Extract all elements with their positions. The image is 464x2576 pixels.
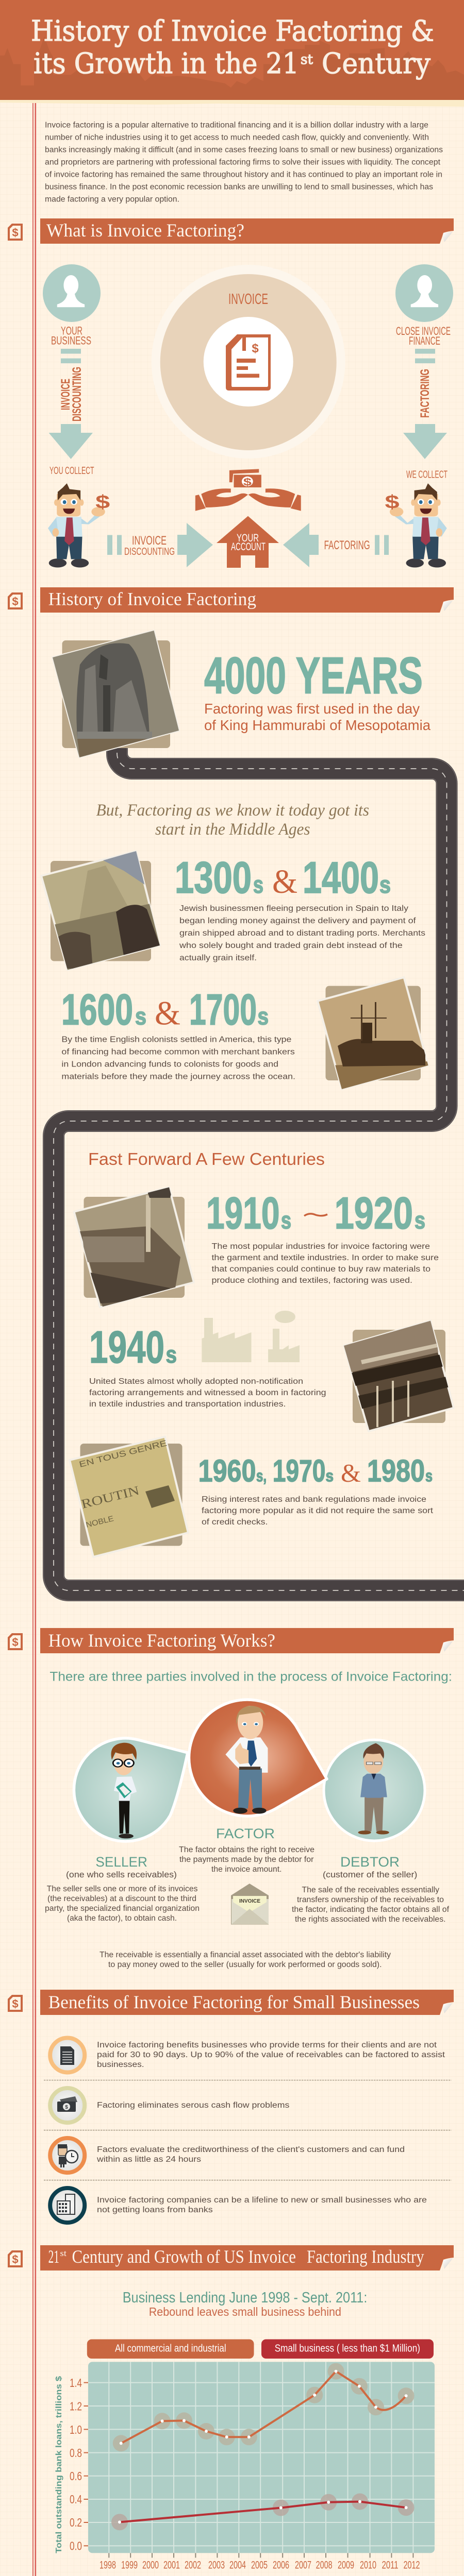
section heading: 21st century growth: Factoring Industry [307,2246,424,2267]
benefit: 24 hour funding [50,2138,405,2173]
photo: vintage paper [70,1437,188,1557]
1910s to 1920s [206,1188,439,1285]
chart legend [87,2339,434,2359]
photo: medieval trading [41,850,165,974]
icon: hands and money [195,469,301,511]
close invoice finance column [395,264,453,480]
business lending heading: Business Lending June 1998 - Sept. 2011: [123,2290,367,2306]
1600s and 1700s: in London advancing funds to colonists for goods and [61,1060,278,1069]
benefit: 24 hour funding: Factors evaluate the creditworthiness of the client's customers and can fund [97,2145,405,2154]
middle ages callout: But, Factoring as we know it today got its [96,801,369,820]
debtor description [292,1854,450,1924]
1910s to 1920s: produce clothing and textiles, factoring was used. [211,1276,412,1285]
factor description: FACTOR [216,1826,275,1841]
arrow: factoring: FACTORING [324,538,370,552]
benefit: terms: paid for 30 to 90 days. Up to 90% of the value of receivables can be factored to assist [97,2050,445,2059]
section heading: how invoice factoring works [8,1628,454,1653]
1910s to 1920s: s [415,1207,425,1233]
1300s and 1400s [175,853,425,962]
1910s to 1920s: 1910 [206,1188,279,1239]
title: History of Invoice Factoring & [31,14,434,47]
character: we collect [385,483,447,567]
seller description: (aka the factor), to obtain cash. [67,1914,177,1923]
seller description [45,1854,200,1923]
x axis labels: 2011 [382,2559,399,2571]
y axis labels: 0.2 [70,2516,82,2529]
photo: vintage paper: ROUTIN [80,1484,141,1512]
benefit: terms: Invoice factoring benefits businesses who provide terms for their clients and are not [97,2041,437,2049]
title: Century [322,47,430,80]
1910s to 1920s: The most popular industries for invoice factoring were [211,1242,430,1251]
series: all commercial and industrial [113,2363,415,2451]
benefit: terms: businesses. [97,2060,144,2069]
y axis title: Total outstanding bank loans, trillions $ [55,2376,63,2553]
photo: textile mill [74,1185,194,1309]
your business column: YOU COLLECT [49,465,94,477]
seller description: SELLER [95,1854,147,1870]
arrow: invoice discounting: INVOICE [132,534,167,548]
intro text: and proprietors are partnering with professional factoring firms to solve their issues with liquidity. The concept [45,158,441,167]
torn paper edge [0,100,464,107]
1600s and 1700s: s [135,1003,146,1029]
benefit: lifeline: Invoice factoring companies can be a lifeline to new or small businesses who are [97,2196,427,2205]
business lending heading [123,2290,367,2318]
x axis labels: 2009 [338,2559,354,2571]
1960s 1970s and 1980s: Rising interest rates and bank regulations made invoice [202,1495,426,1504]
seller bubble [74,1738,188,1841]
title [31,14,434,80]
1600s and 1700s: of financing had become common with merchant bankers [61,1048,295,1057]
section heading: what is invoice factoring: What is Invoice Factoring? [46,220,244,241]
photo: steam ship [318,977,430,1092]
header banner [0,0,464,100]
photo: textile looms [340,1316,454,1431]
chart legend: All commercial and industrial [115,2343,226,2354]
1600s and 1700s: s [258,1003,269,1029]
icon: invoice envelope: INVOICE [239,1899,260,1904]
benefit: terms [50,2038,445,2072]
y axis labels: 1.0 [70,2423,82,2436]
road timeline [54,742,464,1590]
4000 years: of King Hammurabi of Mesopotamia [204,717,431,733]
panel: benefits list [44,2038,452,2223]
debtor description: The sale of the receivables essentially [302,1886,439,1894]
y axis labels: 0.4 [70,2493,82,2506]
icon: your account house: ACCOUNT [231,541,266,553]
intro text: made factoring a very popular option. [45,195,179,204]
section heading: history of invoice factoring: History of Invoice Factoring [48,588,256,609]
seller description: (one who sells receivables) [66,1870,177,1879]
benefit: cash flow [50,2088,290,2123]
your business column: INVOICE [59,379,73,410]
section heading: 21st century growth: 21 [48,2246,59,2267]
invoice circle: INVOICE [228,291,268,308]
seller description: (the receivables) at a discount to the third [47,1894,196,1903]
1910s to 1920s: 1920 [335,1188,413,1239]
1300s and 1400s: began lending money against the delivery and payment of [179,917,416,925]
your business column [43,264,101,477]
icon: your account house: YOUR [237,532,259,544]
middle ages callout [96,801,369,839]
title: its Growth in the 21 [34,47,299,80]
benefit: 24 hour funding: within as little as 24 hours [96,2155,201,2164]
receivable note: to pay money owed to the seller (usually for work performed or goods sold). [108,1960,382,1969]
photo: hammurabi stele [52,630,180,758]
factor description: the payments made by the debtor for [179,1855,313,1864]
1600s and 1700s: 1600 [61,985,133,1033]
x axis labels: 2012 [403,2559,420,2571]
close invoice finance column: FINANCE [409,334,440,347]
intro text: Invoice factoring is a popular alternative to traditional financing and it is a billion dollar industry with a large [45,121,428,130]
1300s and 1400s: s [253,871,263,898]
seller description: party, the specialized financial organization [45,1904,200,1913]
1600s and 1700s [61,985,295,1081]
receivable note: The receivable is essentially a financial asset associated with the debtor's liability [100,1951,391,1959]
1300s and 1400s: 1400 [303,853,379,903]
1300s and 1400s: grain shipped abroad and to distant trading ports. Merchants [179,929,425,938]
1960s 1970s and 1980s: & [341,1459,361,1487]
arrow: invoice discounting [107,523,213,567]
receivable note [100,1951,391,1969]
chart legend: Small business ( less than $1 Million) [275,2343,420,2354]
1910s to 1920s: s [281,1207,291,1233]
1940s: in textile industries and transportation industries. [89,1400,286,1409]
x axis labels: 2003 [208,2559,225,2571]
1960s 1970s and 1980s: 1970 [273,1454,326,1488]
section heading: benefits: Benefits of Invoice Factoring for Small Businesses [48,1992,420,2012]
1940s [89,1321,326,1409]
x axis labels: 2010 [360,2559,376,2571]
section heading: history of invoice factoring [8,587,454,613]
1960s 1970s and 1980s [198,1454,434,1527]
panel: three parties illustration [74,1700,425,1841]
x axis labels: 2005 [251,2559,268,2571]
x axis labels: 2000 [142,2559,159,2571]
section heading: what is invoice factoring [8,218,454,244]
icon: factory silhouette [202,1311,300,1362]
three parties subheading: There are three parties involved in the process of Invoice Factoring: [49,1669,452,1684]
1940s: 1940 [89,1321,164,1372]
line chart: business lending [55,2362,435,2571]
section heading: how invoice factoring works: How Invoice Factoring Works? [48,1630,275,1651]
your business column: YOUR [61,325,82,337]
title: st [301,52,313,67]
section heading: 21st century growth: Century and Growth of US Invoice [72,2246,296,2267]
seller description: The seller sells one or more of its invoices [47,1885,198,1893]
margin rule [32,103,36,2576]
arrow: invoice discounting: DISCOUNTING [124,546,175,557]
middle ages callout: start in the Middle Ages [155,820,310,839]
factor description [179,1826,314,1874]
section heading: 21st century growth [8,2245,454,2270]
debtor description: transfers ownership of the receivables to [297,1895,444,1904]
1300s and 1400s: & [272,863,297,901]
fast forward heading: Fast Forward A Few Centuries [88,1149,325,1168]
debtor description: (customer of the seller) [323,1870,417,1879]
your business column: BUSINESS [51,334,91,347]
x axis labels: 2008 [316,2559,333,2571]
character: you collect [48,483,110,567]
1940s: s [166,1341,177,1368]
1960s 1970s and 1980s: s, [256,1467,267,1485]
icon: invoice document [226,334,271,391]
icon: your account house [217,516,279,568]
1940s: United States almost wholly adopted non-notification [89,1377,303,1386]
1300s and 1400s: who solely bought and traded grain debt instead of the [179,941,403,950]
benefit: cash flow: $ [65,2105,68,2110]
1910s to 1920s: that companies could continue to buy raw materials to [211,1265,430,1274]
business lending heading: Rebound leaves small business behind [149,2305,341,2318]
photo: vintage paper: EN TOUS GENRE [78,1439,168,1469]
y axis labels [70,2376,82,2552]
1960s 1970s and 1980s: 1980 [367,1454,425,1488]
x axis labels: 1998 [100,2559,116,2571]
4000 years: Factoring was first used in the day [204,701,420,717]
x axis labels [100,2559,420,2571]
y axis labels: 0.6 [70,2469,82,2483]
factor description: the invoice amount. [211,1865,281,1874]
y axis labels: 0.8 [70,2446,82,2460]
y axis labels: 0.0 [70,2539,82,2552]
y axis labels: 1.4 [70,2376,82,2389]
benefit: lifeline: not getting loans from banks [97,2206,213,2214]
character: we collect: $ [385,492,400,513]
1940s: factoring arrangements and witnessed a boom in factoring [89,1388,326,1397]
1600s and 1700s: materials before they made the journey across the ocean. [61,1073,295,1081]
x axis labels: 1999 [121,2559,138,2571]
intro text [45,121,443,204]
invoice circle [152,265,345,459]
icon: invoice document: $ [252,342,259,355]
skyline [0,36,464,100]
y axis labels: 1.2 [70,2400,82,2413]
section heading: 21st century growth: st [60,2248,67,2258]
1600s and 1700s: By the time English colonists settled in America, this type [61,1036,291,1044]
x axis labels: 2004 [229,2559,246,2571]
intro text: banks increasingly making it difficult (and in some cases freezing loans to small or new business) organizations [45,146,443,155]
debtor description: DEBTOR [340,1854,400,1870]
factor description: The factor obtains the right to receive [179,1845,314,1854]
x axis labels: 2002 [185,2559,201,2571]
your business column: DISCOUNTING [70,367,84,421]
debtor description: the factor, indicating the factor obtains all of [292,1905,450,1914]
benefit: cash flow: Factoring eliminates serous cash flow problems [97,2101,290,2110]
section heading: benefits [8,1990,454,2015]
1960s 1970s and 1980s: of credit checks. [202,1518,268,1527]
1300s and 1400s: actually grain itself. [179,954,257,962]
arrow: factoring [283,523,389,567]
benefit: lifeline [50,2188,427,2223]
character: you collect: $ [95,492,110,513]
debtor bubble [324,1740,425,1841]
icon: hands and money: $ [243,476,252,488]
close invoice finance column: FACTORING [418,369,432,418]
debtor description: the rights associated with the receivables. [295,1915,445,1924]
1300s and 1400s: Jewish businessmen fleeing persecution in Spain to Italy [179,904,408,913]
icon: invoice envelope [231,1884,269,1925]
intro text: business finance. In the post economic recession banks are unwilling to lend to small businesses, which has [45,183,433,192]
1300s and 1400s: s [379,871,391,898]
1960s 1970s and 1980s: s [425,1467,433,1485]
1960s 1970s and 1980s: s [326,1467,334,1485]
factor bubble [189,1700,327,1816]
1300s and 1400s: 1300 [175,853,252,903]
photo: vintage paper: NOBLE [85,1514,114,1530]
x axis labels: 2006 [273,2559,289,2571]
intro text: number of niche industries using it to get access to much needed cash flow, quickly and conveniently. With [45,133,429,142]
1910s to 1920s: the garment and textile industries. In order to make sure [211,1253,439,1262]
1600s and 1700s: 1700 [189,985,257,1033]
4000 years [204,647,431,733]
1600s and 1700s: & [155,994,180,1032]
1960s 1970s and 1980s: 1960 [198,1454,256,1488]
series: small business [111,2494,415,2530]
panel: what is invoice factoring diagram [43,264,453,568]
x axis labels: 2007 [295,2559,311,2571]
intro text: of invoice factoring has remained the same throughout history and it has continued to play an important role in [45,170,442,179]
x axis labels: 2001 [163,2559,180,2571]
1960s 1970s and 1980s: factoring more popular as it did not require the same sort [202,1506,434,1515]
